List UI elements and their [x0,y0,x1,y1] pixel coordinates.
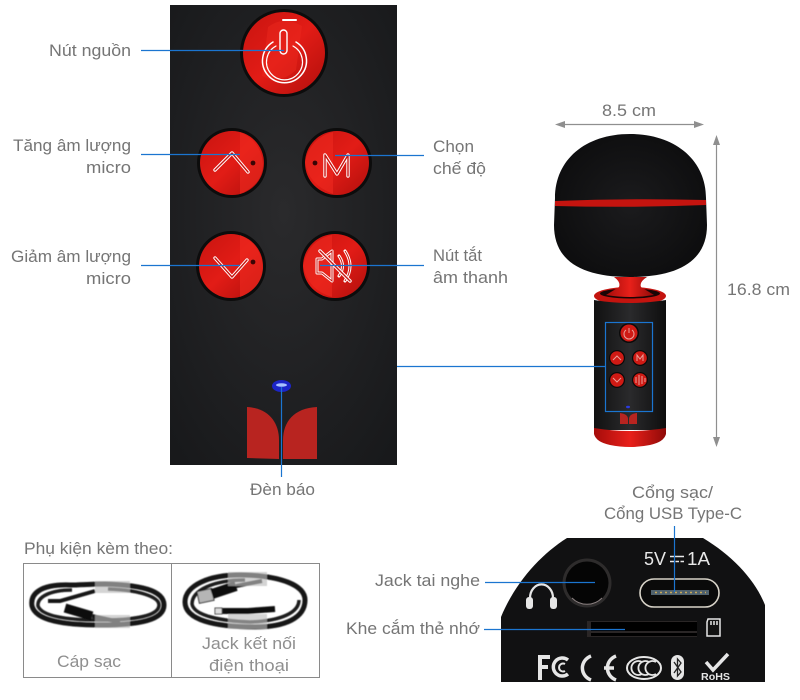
dimension: width: 8.5 cm [602,101,656,120]
label: volume down [11,247,131,288]
label: headphone jack: Jack tai nghe [375,571,480,590]
leader line: memory card slot [484,628,625,630]
microphone product image [554,134,707,447]
button: mode M [302,128,372,198]
icon: headphones [526,584,557,609]
leader line: indicator light [280,387,282,477]
dimension: height: 16.8 cm [727,280,790,299]
indicator LED [272,380,291,392]
label: memory card slot: Khe cắm thẻ nhớ [346,619,480,638]
button: volume up [197,128,267,198]
mini buttons [609,323,648,388]
rating text 5V 1A: 1A [687,549,710,569]
label: phone jack [202,634,296,675]
label: volume up: micro [86,158,131,177]
brand logo [247,407,317,459]
leader line: mode [335,154,424,156]
microphone body [594,287,666,447]
icon: CCC logo [627,657,661,679]
label: mute [433,246,508,287]
label: volume up: Tăng âm lượng [13,136,131,155]
leader line: headphone jack [485,582,595,584]
mini logo [620,413,637,424]
leader line: mute [320,264,424,266]
button: volume down [196,231,266,301]
microphone head [554,134,707,277]
label: USB port [604,483,742,523]
slot: memory card [587,621,697,637]
icon: RoHS check [701,654,730,683]
icon: RoHS check: RoHS [701,672,730,683]
label: mode select: chế độ [433,159,486,178]
label: USB port: Cổng sạc/ [632,483,713,502]
dimension: height [713,135,790,447]
rating text 5V 1A [644,549,710,569]
accessory: phone connection jack [185,572,305,629]
accessory: charging cable [32,581,164,628]
leader line: USB port [674,526,676,592]
panel: microphone control close-up [170,5,397,465]
leader line: volume down [141,264,240,266]
label: phone jack: Jack kết nối [202,634,296,653]
port: USB Type-C [640,579,719,607]
dimension: width [555,101,704,128]
button: mute [300,231,370,301]
icon: FCC logo [540,657,568,680]
label: volume up [13,136,131,177]
microphone neck [606,277,654,297]
leader line: power [141,50,284,52]
label: mute: Nút tắt [433,246,482,265]
label: mode select [433,137,486,178]
leader line: control area [397,366,605,368]
label: mode select: Chọn [433,137,474,156]
icon: memory card [707,619,720,636]
rating text 5V 1A: 5V [644,549,666,569]
label: volume down: micro [86,269,131,288]
label: volume down: Giảm âm lượng [11,247,131,266]
headphone jack [562,558,612,608]
label: indicator light: Đèn báo [250,480,315,499]
highlight box on control area [606,322,652,412]
panel: accessories box [24,563,320,678]
label: mute: âm thanh [433,268,508,287]
button: power [240,9,328,97]
icon: CE logo [582,656,616,680]
heading: accessories: Phụ kiện kèm theo: [24,539,173,558]
panel: microphone base with ports [501,538,765,683]
mini LED [626,406,630,408]
icon: Bluetooth [671,655,684,680]
label: USB port: Cổng USB Type-C [604,504,742,523]
label: phone jack: điện thoại [209,656,289,675]
label: charging cable: Cáp sạc [57,652,122,671]
leader line: volume up [141,154,240,156]
label: power button: Nút nguồn [49,41,131,60]
